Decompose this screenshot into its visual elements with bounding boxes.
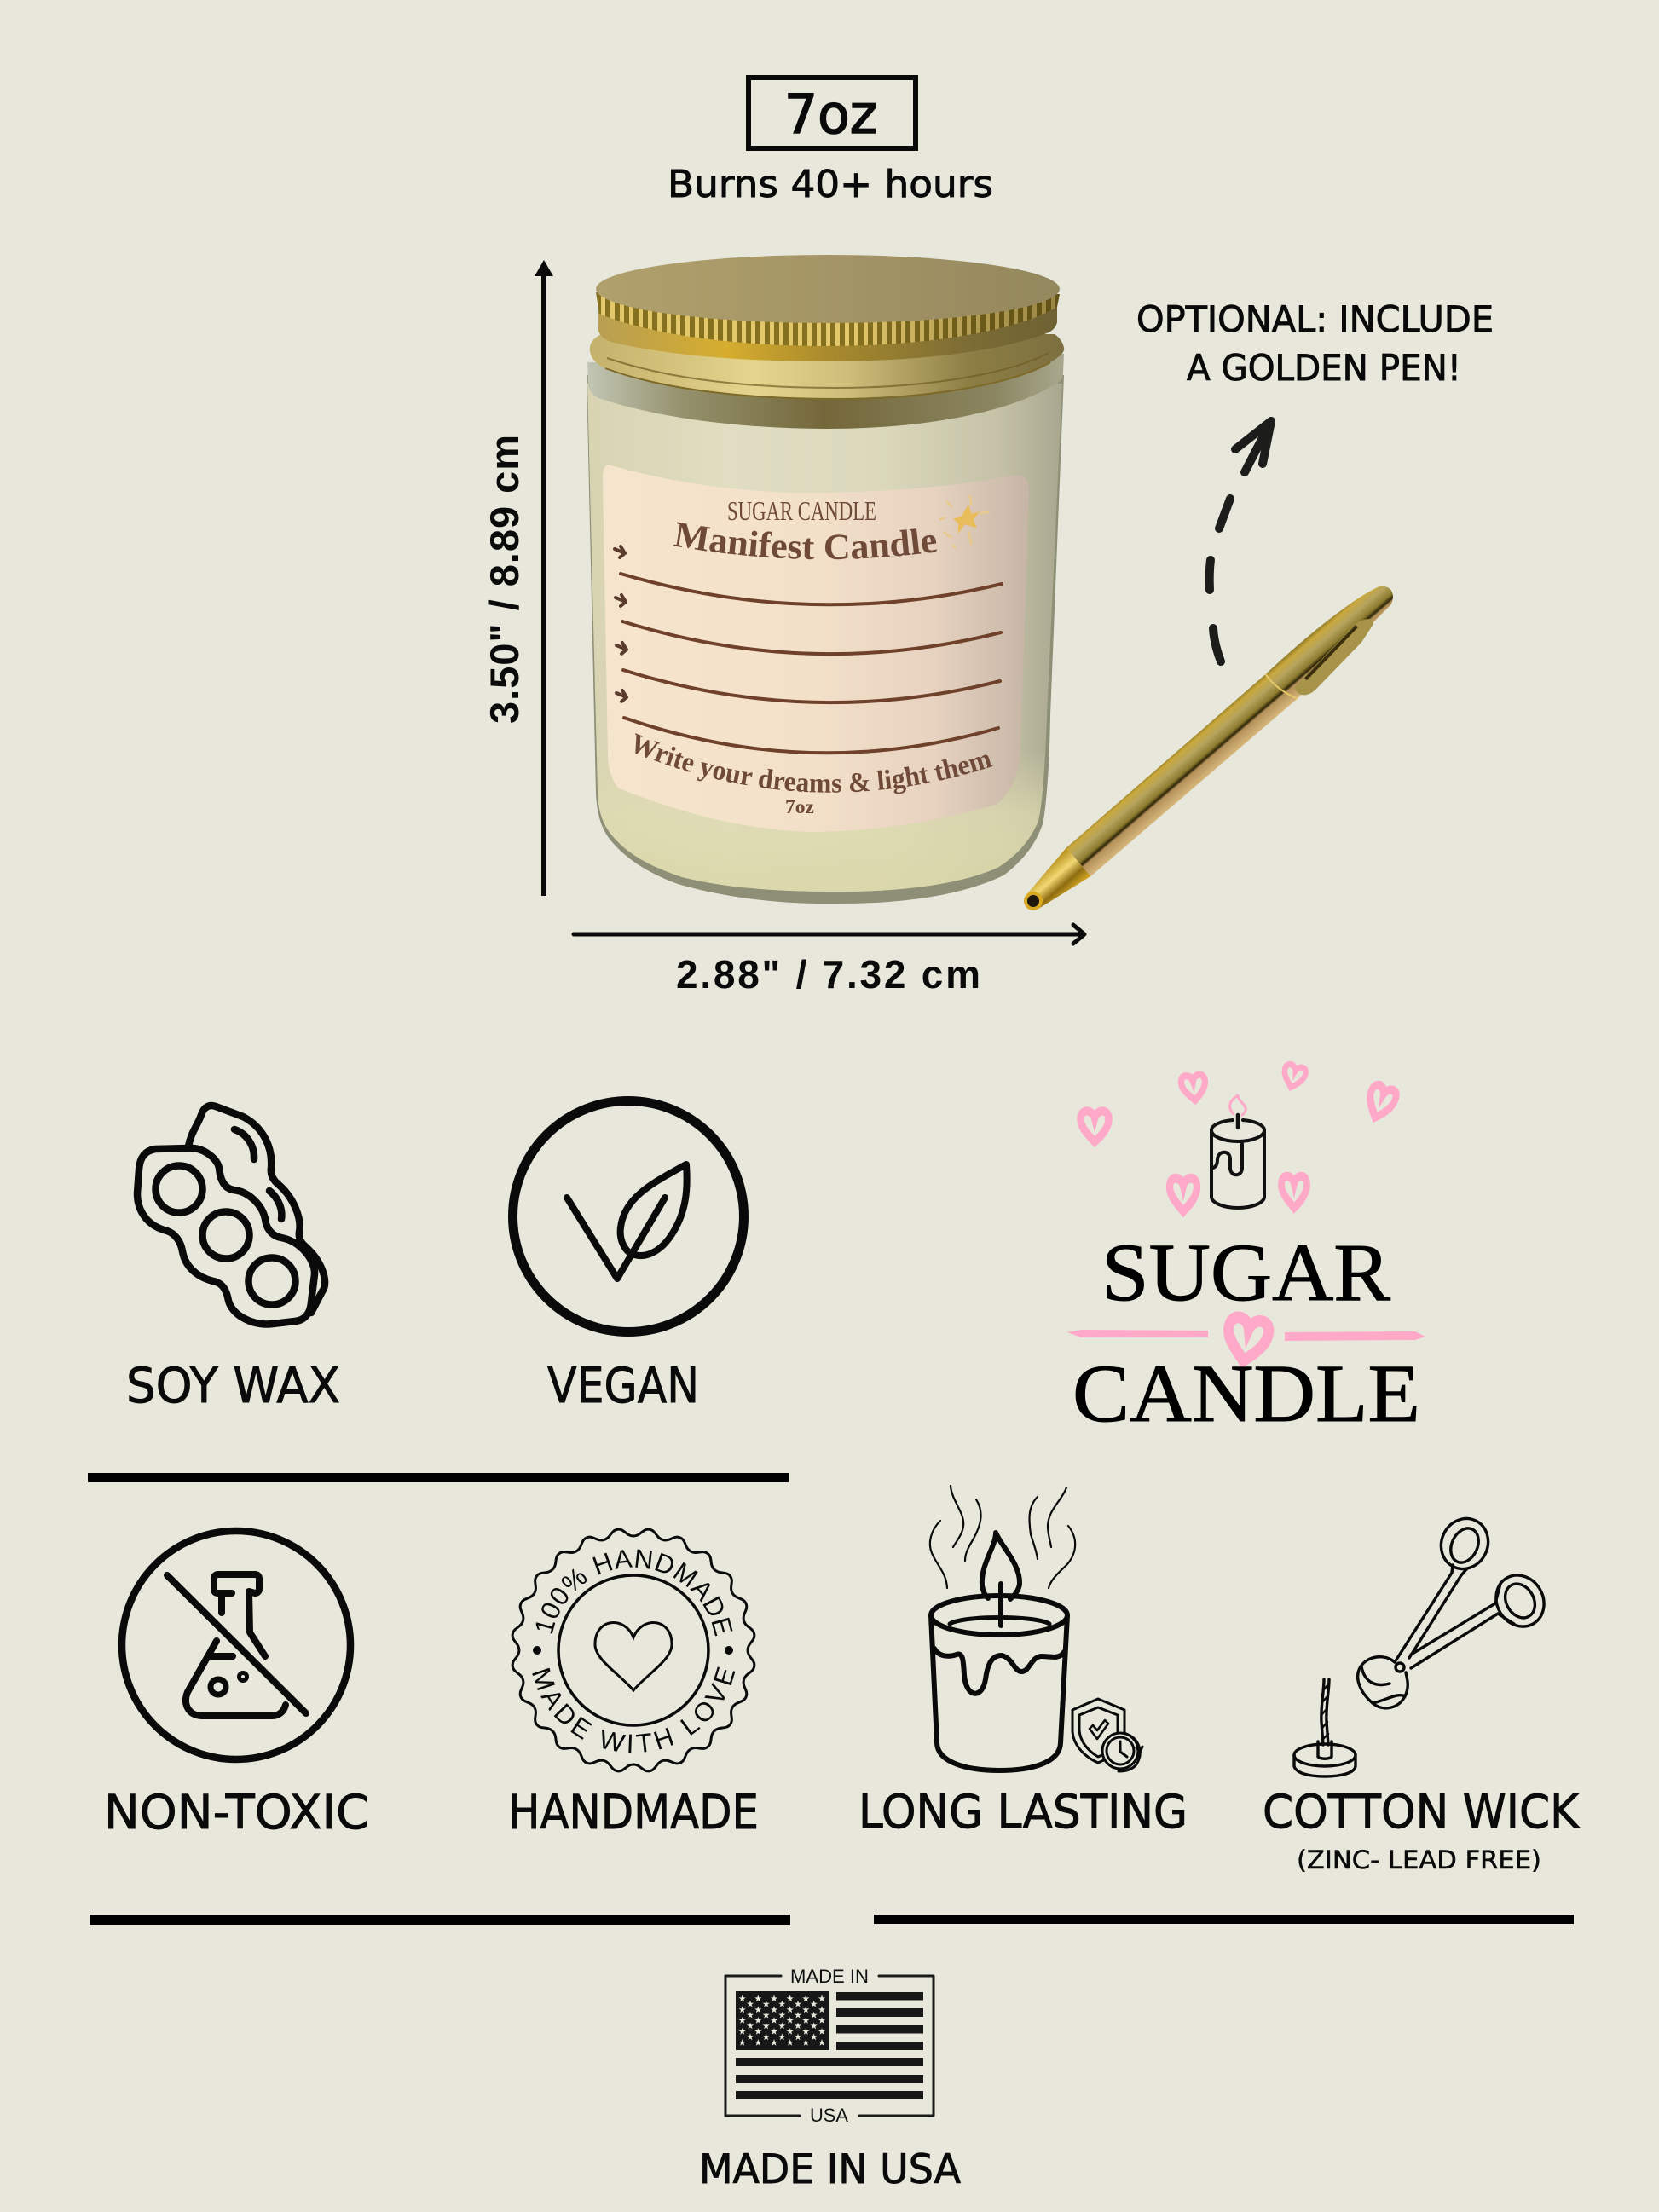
label: made in usa: MADE IN USA	[699, 2146, 961, 2193]
label: long lasting: LONG LASTING	[858, 1785, 1188, 1839]
logo candle	[1211, 1095, 1264, 1208]
label title: Manifest Candle	[673, 522, 937, 559]
height dimension label: 3.50" / 8.89 cm	[482, 435, 527, 724]
logo divider with heart	[1067, 1316, 1425, 1364]
lid knurled edge	[596, 292, 1060, 346]
candle jar outline	[931, 1596, 1067, 1770]
icon: handmade badge	[512, 1528, 755, 1773]
logo word: candle: CANDLE	[1072, 1348, 1420, 1439]
jar label	[603, 465, 1029, 832]
divider: lower right	[874, 1915, 1574, 1924]
divider: upper left	[88, 1473, 789, 1482]
size badge: 7oz	[749, 78, 916, 148]
callout: optional golden pen: A GOLDEN PEN!	[1187, 347, 1461, 389]
flag frame	[725, 1976, 934, 2116]
callout: optional golden pen: OPTIONAL: INCLUDE	[1136, 298, 1494, 340]
divider: lower left	[90, 1915, 790, 1925]
flag stripes	[736, 1992, 923, 2099]
badge dots	[533, 1646, 733, 1655]
label: vegan: VEGAN	[547, 1358, 699, 1414]
candle smoke	[930, 1486, 1075, 1588]
label: soy wax: SOY WAX	[126, 1358, 340, 1414]
flag text bottom: USA	[810, 2105, 848, 2126]
label writing lines	[621, 574, 1002, 753]
icon: vegan	[513, 1101, 743, 1331]
logo word: sugar: SUGAR	[1101, 1227, 1390, 1318]
icon: wick trimmer and wick	[1294, 1510, 1553, 1776]
badge bottom text: MADE WITH LOVE	[532, 1666, 735, 1753]
lid skirt	[598, 300, 1057, 361]
lid top	[596, 255, 1060, 323]
icon: made in usa flag	[725, 1966, 934, 2126]
logo hearts	[1081, 1063, 1398, 1211]
metal neck ring	[590, 334, 1064, 399]
icon: soy wax	[137, 1106, 325, 1324]
shield and clock	[1072, 1699, 1142, 1771]
badge scalloped edge	[511, 1528, 756, 1773]
icon: non-toxic	[122, 1531, 350, 1759]
glass neck	[587, 354, 1064, 429]
flag canton with stars	[736, 1991, 830, 2050]
label: handmade: HANDMADE	[508, 1785, 759, 1839]
icon: long lasting candle	[930, 1486, 1142, 1771]
arrow: height dimension	[535, 260, 553, 896]
label size: 7oz	[785, 796, 814, 817]
golden pen	[1012, 575, 1408, 925]
label: non-toxic: NON-TOXIC	[104, 1785, 369, 1839]
badge top text: 100% HANDMADE	[535, 1550, 733, 1637]
sublabel: zinc lead free: (ZINC- LEAD FREE)	[1297, 1845, 1541, 1874]
flag text top: MADE IN	[790, 1966, 869, 1987]
wick on tab	[1294, 1679, 1356, 1776]
label brand text: SUGAR CANDLE	[727, 495, 876, 526]
size badge: 7oz: 7oz	[784, 84, 877, 146]
badge heart	[595, 1623, 672, 1690]
candle wick	[998, 1584, 1003, 1626]
candle flame	[982, 1533, 1020, 1599]
label tagline: Write your dreams & light them	[635, 733, 992, 794]
wax fill	[587, 384, 1062, 892]
burn time text: Burns 40+ hours	[668, 163, 993, 206]
trimmer	[1358, 1510, 1553, 1708]
glass jar body	[587, 375, 1064, 904]
label arrows	[615, 546, 627, 702]
callout: optional golden pen	[1136, 298, 1494, 389]
width dimension label: 2.88" / 7.32 cm	[676, 952, 980, 996]
label star	[940, 496, 988, 547]
badge inner circle	[558, 1575, 708, 1725]
dashed arrow to callout	[1210, 421, 1271, 661]
arrow: width dimension	[574, 925, 1084, 944]
logo: sugar candle	[1067, 1063, 1425, 1439]
label: cotton wick: COTTON WICK	[1263, 1785, 1581, 1839]
candle jar photo	[587, 255, 1064, 904]
